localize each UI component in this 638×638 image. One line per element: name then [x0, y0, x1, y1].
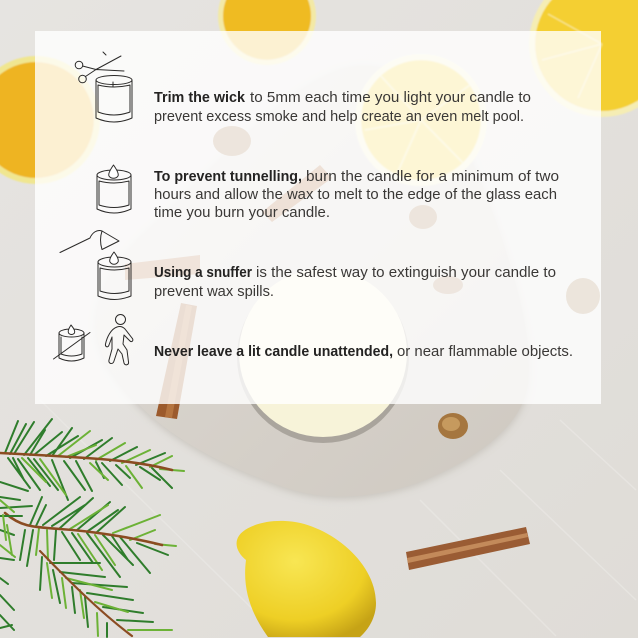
tip 2 text: To prevent tunnelling, — [154, 169, 302, 185]
icon: glass with trimmed wick — [96, 76, 132, 122]
icon: scissors — [75, 52, 124, 83]
nutmeg: centre — [409, 205, 437, 229]
lemon slice: centre — [355, 54, 487, 186]
icon: scissors trimming wick over candle glass — [75, 52, 132, 122]
pine branch: upper — [0, 419, 184, 500]
pine branch: middle — [5, 497, 176, 577]
icon: lit candle for tunnelling — [97, 165, 131, 213]
tip 1 text: Trim the wick — [154, 90, 246, 106]
lemon slice: top centre — [218, 0, 316, 65]
lemon slice: top right — [529, 0, 638, 117]
tip 3 text — [154, 265, 556, 300]
nutmeg: right — [566, 278, 600, 314]
tip 1 text: prevent excess smoke and help create an even melt pool. — [154, 109, 524, 125]
cinnamon stick: on plate — [156, 303, 197, 419]
tip 3 text: Using a snuffer — [154, 265, 252, 281]
tip 1 text: to 5mm each time you light your candle to — [250, 90, 531, 106]
tip 2 text — [154, 169, 559, 221]
icon: snuffer — [60, 230, 119, 252]
cinnamon stick: bottom right — [406, 527, 530, 570]
tip 1 text — [154, 90, 531, 125]
whole lemon — [237, 521, 376, 637]
tip 2 text: time you burn your candle. — [154, 205, 330, 221]
tip 2 text: hours and allow the wax to melt to the edge of the glass each — [154, 187, 557, 203]
tip 3 text: prevent wax spills. — [154, 284, 274, 300]
cinnamon stick: tall — [262, 165, 332, 222]
nutmeg: plate — [438, 413, 468, 439]
tip 2 text: burn the candle for a minimum of two — [306, 169, 559, 185]
icon: lit candle under snuffer — [98, 252, 131, 300]
nutmeg: upper — [213, 126, 251, 156]
icon: crossed-out candle — [54, 325, 90, 361]
pine branch: lower — [40, 551, 172, 637]
translucent white panel — [35, 31, 601, 404]
tip 4 text: Never leave a lit candle unattended, — [154, 344, 393, 360]
cinnamon stick: upper — [125, 255, 200, 280]
nutmeg: lower centre — [433, 276, 463, 294]
tip 4 text: or near flammable objects. — [397, 344, 573, 360]
tip 4 text — [154, 344, 573, 360]
tip 3 text: is the safest way to extinguish your candle to — [256, 265, 556, 281]
plate — [96, 65, 529, 499]
candle in glass — [237, 269, 409, 443]
pine branch: left edge — [0, 482, 32, 630]
lemon slice: left — [0, 56, 100, 184]
icon: person walking away — [105, 314, 133, 365]
